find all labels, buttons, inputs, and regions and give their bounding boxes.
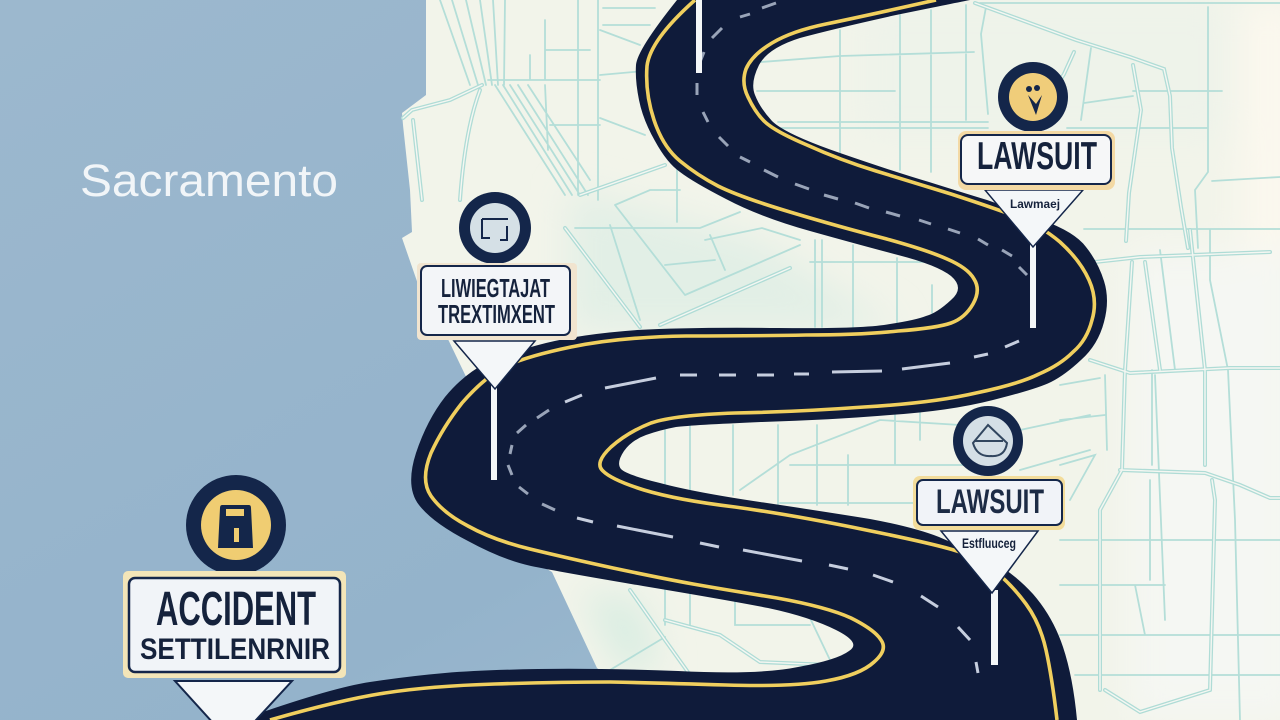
road board: LAWSUIT — [977, 135, 1097, 178]
direction triangle: Lawmaej — [1010, 197, 1060, 211]
top signpost stub — [696, 0, 702, 73]
signpost — [991, 590, 998, 665]
icon: scales badge — [953, 406, 1023, 476]
sign: lawsuit lower — [913, 406, 1065, 665]
sign: lawsuit upper — [958, 62, 1115, 328]
road board — [417, 263, 577, 340]
road board: TREXTIMXENT — [438, 299, 555, 329]
road surface — [240, 0, 1107, 720]
road centre dashes: lower — [565, 341, 1019, 673]
road board: LIWIEGTAJAT — [441, 273, 550, 303]
icon: document badge — [186, 475, 286, 575]
road board — [123, 571, 346, 678]
single streets — [440, 0, 1280, 720]
direction triangle: Estfluuceg — [962, 535, 1016, 551]
signpost — [1030, 243, 1036, 328]
signpost — [491, 385, 497, 480]
icon: wallet badge — [459, 192, 531, 264]
road board: ACCIDENT — [156, 583, 316, 636]
double carriageway centres — [403, 3, 1280, 712]
road edge line: outer — [600, 0, 1094, 720]
icon: gavel badge — [998, 62, 1068, 132]
land area — [402, 0, 1280, 720]
street map — [403, 0, 1280, 720]
direction triangle — [175, 681, 292, 720]
road board — [958, 131, 1115, 190]
sign: accident settlement — [123, 475, 346, 720]
direction triangle — [941, 531, 1038, 593]
double carriageways — [403, 3, 1280, 712]
direction triangle — [454, 341, 535, 389]
road centre dashes: upper — [508, 3, 1027, 510]
road board: LAWSUIT — [936, 483, 1044, 521]
direction triangle — [985, 190, 1083, 247]
city label: Sacramento — [80, 155, 338, 206]
road edge line: inner — [270, 0, 977, 720]
road board: SETTILENRNIR — [140, 633, 330, 666]
road — [240, 0, 1107, 720]
road board — [913, 476, 1065, 530]
sign: treatment — [417, 192, 577, 480]
land tint patches — [570, 0, 1280, 720]
